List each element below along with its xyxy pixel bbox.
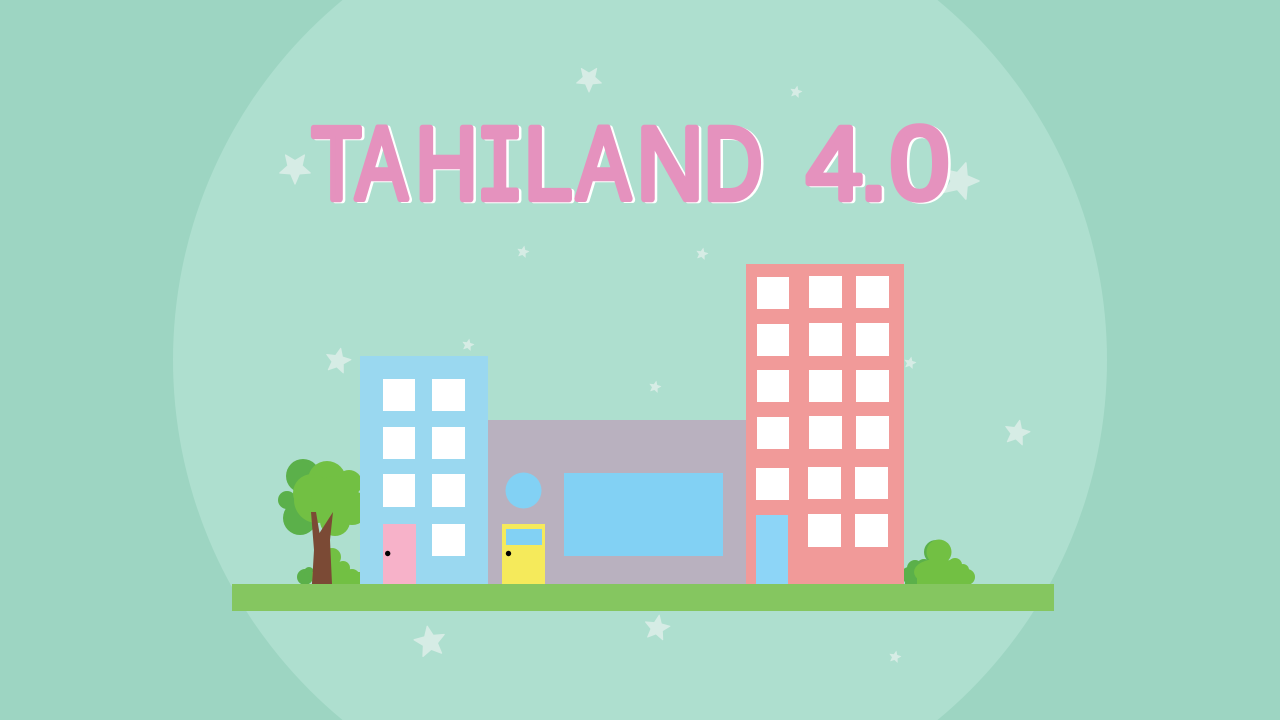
title: A	[577, 105, 631, 221]
title	[312, 105, 952, 233]
title: .	[862, 107, 890, 222]
title: T	[312, 106, 361, 221]
title: D	[706, 107, 765, 222]
title: H	[415, 107, 478, 222]
yellow door	[502, 524, 545, 584]
blue building	[360, 356, 488, 584]
title: 0	[890, 106, 949, 221]
title: 0	[892, 107, 952, 222]
tree and small bush	[278, 459, 369, 585]
title: I	[478, 110, 527, 233]
tree trunk	[311, 512, 333, 584]
title: A	[579, 106, 633, 222]
title: N	[639, 106, 706, 222]
title: I	[475, 109, 525, 232]
title: .	[859, 106, 888, 221]
title: D	[704, 106, 762, 221]
title: A	[358, 108, 410, 223]
title: T	[314, 107, 364, 222]
title: 4	[806, 106, 863, 221]
right bush	[901, 540, 975, 585]
blue door	[756, 515, 788, 584]
decorative stars	[280, 68, 1032, 663]
title: A	[356, 107, 407, 222]
ground	[232, 584, 1054, 611]
pink door	[383, 524, 416, 584]
title: H	[418, 108, 480, 223]
title: N	[637, 105, 703, 221]
grey building	[488, 420, 746, 584]
large pale circle	[173, 0, 1107, 720]
red building	[746, 264, 904, 584]
title: L	[526, 108, 575, 223]
title: L	[524, 107, 572, 222]
title: 4	[809, 107, 865, 222]
